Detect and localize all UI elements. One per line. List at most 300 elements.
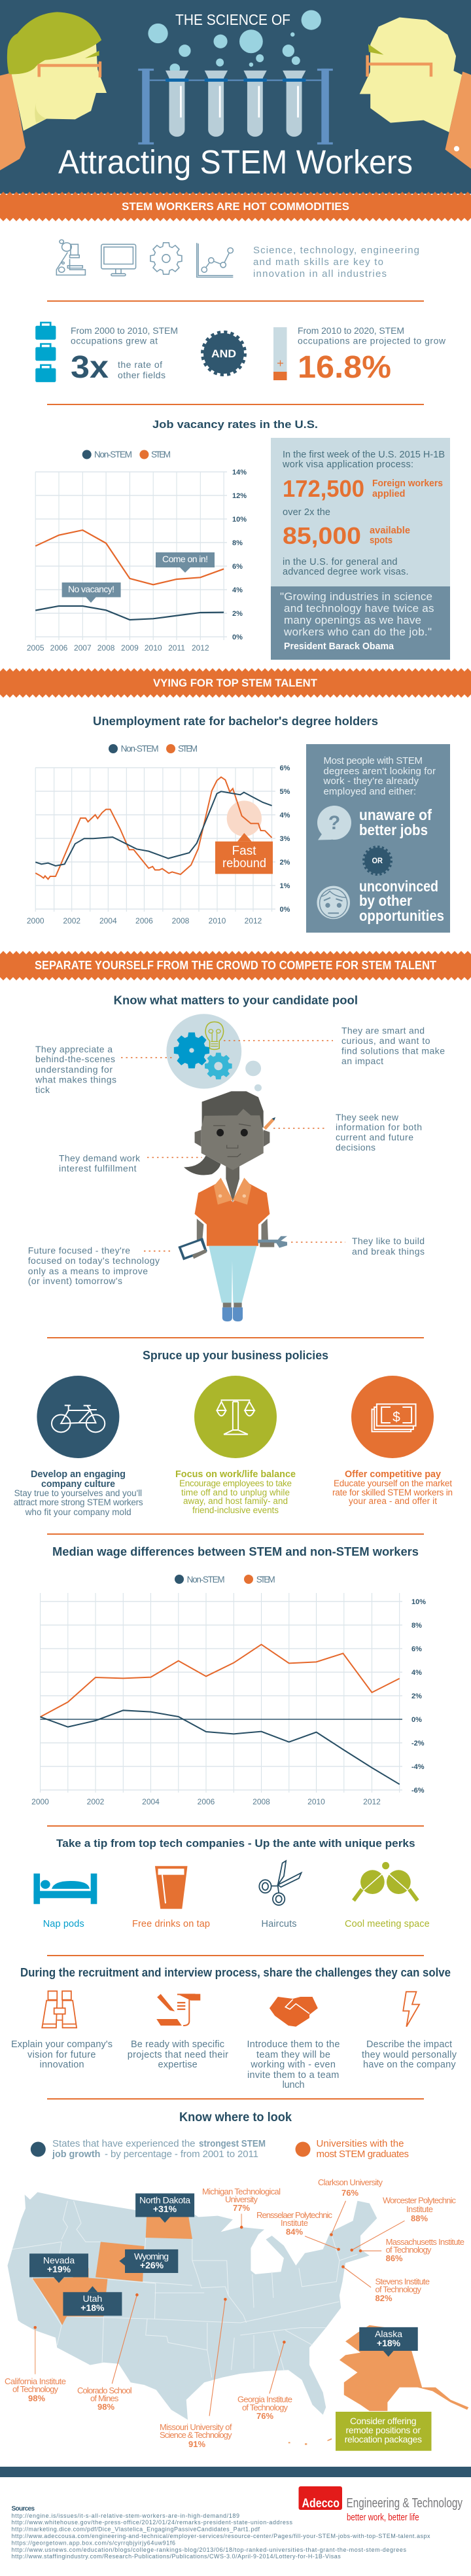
text: balance: Encourage employees to take <box>179 1478 292 1488</box>
challenges row <box>11 1991 457 2090</box>
leader lines <box>35 2201 405 2416</box>
text: impact <box>362 2039 457 2070</box>
label: Alaska: Alaska <box>375 2329 402 2339</box>
callout: fast rebound: Fast <box>232 844 256 858</box>
label: Utah: +18% <box>80 2302 105 2313</box>
annotation: behind the scenes: understanding for <box>35 1064 113 1075</box>
chart: job vacancy rates: 2012 <box>192 643 209 653</box>
legend: STEM <box>178 744 198 754</box>
legend: Non-STEM <box>121 744 159 754</box>
chart: unemployment rate: 2008 <box>172 916 190 925</box>
panel: H-1B visa figures: In the first week of the U.S. 2015 H-1B <box>283 450 445 460</box>
panel: why they aren't looking: employed and either: <box>323 786 416 797</box>
panel: H-1B visa figures: over 2x the <box>283 507 330 518</box>
line series <box>35 530 224 620</box>
university: MIT: of Technology <box>386 2245 432 2255</box>
title: Attracting STEM Workers <box>58 143 413 181</box>
panel: Obama quote: workers who can do the job." <box>283 626 432 638</box>
text: team: team they will be <box>256 2050 330 2060</box>
text: unconvinced: by other <box>359 892 412 909</box>
illustration: right scientist head <box>360 18 471 169</box>
axis labels <box>411 1598 426 1795</box>
title <box>58 11 413 181</box>
axis labels: 0% <box>280 906 290 914</box>
text: projects: Be ready with specific <box>131 2039 224 2050</box>
chart: job vacancy rates: 2009 <box>121 643 139 653</box>
stat: 3x rate: the rate of <box>118 359 162 370</box>
university: Missouri S&T: 91% <box>188 2439 205 2449</box>
text: projects <box>128 2039 228 2070</box>
stat: 172,500: applied <box>372 488 406 499</box>
university: Michigan Tech <box>202 2187 281 2213</box>
icon: bicycle <box>52 1405 105 1432</box>
axis labels: 2% <box>280 859 290 867</box>
text: balance: away, and host family- and <box>183 1496 288 1506</box>
text: unconvinced <box>359 878 444 924</box>
university: Missouri S&T <box>160 2422 232 2449</box>
callout: fast rebound: rebound <box>222 857 266 870</box>
axis labels: 3% <box>280 835 290 843</box>
heading: recruitment process: During the recruitment and interview process, share the challenges they can solve <box>20 1966 451 1979</box>
gauge: 16.8% bar <box>273 327 287 380</box>
axis labels: 5% <box>280 788 290 796</box>
university: Clarkson <box>318 2177 383 2198</box>
section banner: separate yourself: SEPARATE YOURSELF FROM THE CROWD TO COMPETE FOR STEM TALENT <box>35 959 436 972</box>
university: Colorado Mines: 98% <box>97 2402 114 2412</box>
university: Clarkson: 76% <box>341 2188 358 2198</box>
university: Worcester: Worcester Polytechnic <box>383 2196 457 2206</box>
state: Utah <box>66 2268 107 2317</box>
state: Alaska <box>340 2325 468 2411</box>
chart: median wage differences: 2008 <box>253 1797 270 1806</box>
text: unconvinced: unconvinced <box>359 878 438 895</box>
text: unconvinced: opportunities <box>359 907 444 924</box>
map: United States <box>5 2177 468 2449</box>
text: vision <box>11 2039 113 2070</box>
annotation: behind the scenes: They appreciate a <box>35 1044 113 1054</box>
icon: unsure face <box>317 886 350 919</box>
callout: remote positions: remote positions or <box>345 2425 421 2435</box>
stat: 3x rate: occupations grew at <box>71 335 158 346</box>
perk labels: Cool meeting space <box>345 1919 430 1929</box>
icon: question bubble: ? <box>328 812 340 834</box>
annotation: future focused: (or invent) tomorrow's <box>28 1276 122 1286</box>
annotation: seek new information: current and future <box>336 1132 413 1142</box>
state: North Dakota <box>146 2217 192 2239</box>
icon: bed <box>33 1874 97 1904</box>
university: Georgia Tech: 76% <box>256 2411 273 2421</box>
heading: candidate pool: Know what matters to your candidate pool <box>114 994 358 1007</box>
stat: 16.8% <box>298 325 446 385</box>
stat: 16.8%: occupations are projected to grow <box>298 335 446 346</box>
icon: binoculars <box>42 1991 77 2028</box>
university: Missouri S&T: Science & Technology <box>160 2430 232 2440</box>
university: Worcester: 88% <box>411 2213 428 2223</box>
annotation: build and break <box>291 1236 425 1257</box>
chart: job vacancy rates: 2008 <box>97 643 115 653</box>
badge: AND <box>203 333 244 374</box>
panel: H-1B visa figures: work visa application process: <box>282 459 413 470</box>
intro text <box>253 245 419 279</box>
legend <box>175 1575 275 1584</box>
text: culture: who fit your company mold <box>25 1507 131 1517</box>
university: Georgia Tech: of Technology <box>242 2403 288 2412</box>
highlight and line series <box>35 777 272 879</box>
icon: question bubble <box>317 806 351 840</box>
annotation: seek new information: decisions <box>336 1142 375 1153</box>
panel: Obama quote: many openings as we have <box>284 614 421 626</box>
text: impact: Describe the impact <box>366 2039 452 2050</box>
line series <box>41 1645 400 1784</box>
stat: 85,000 <box>283 522 410 549</box>
axis labels: 4% <box>280 812 290 819</box>
chart: median wage differences: 2002 <box>87 1797 105 1806</box>
section banner: vying for talent <box>0 668 471 698</box>
chart: unemployment rate: 2004 <box>99 916 117 925</box>
university: Worcester: Institute <box>406 2204 433 2214</box>
university: Stevens: of Technology <box>375 2285 421 2295</box>
illustration: left scientist head <box>0 12 107 170</box>
logo: Adecco: Adecco <box>302 2497 340 2511</box>
axis labels: 4% <box>411 1669 422 1677</box>
intro text: innovation in all industries <box>253 268 387 279</box>
chart: median wage differences <box>31 1575 426 1806</box>
chart: unemployment rate <box>27 744 290 925</box>
header panel <box>0 0 471 194</box>
stat: 3x rate: other fields <box>118 370 166 380</box>
illustration: candidate with thought bubble <box>166 1014 287 1321</box>
map legend: Universities with the <box>317 2138 404 2149</box>
annotation: smart and curious: find solutions that make <box>341 1046 445 1056</box>
university: Stevens <box>375 2276 430 2303</box>
chart: job vacancy rates: 2006 <box>50 643 68 653</box>
intro text: and math skills are key to <box>253 257 383 268</box>
legend <box>82 450 171 459</box>
axis labels <box>280 764 290 914</box>
icon: handshake <box>270 1997 318 2027</box>
university: MIT <box>386 2237 464 2263</box>
text: vision: vision for future <box>27 2050 96 2060</box>
heading: business policies: Spruce up your business policies <box>143 1349 328 1362</box>
callout: remote positions <box>336 2412 432 2451</box>
annotation: smart and curious: They are smart and <box>341 1026 425 1036</box>
badge: AND: AND <box>211 348 236 360</box>
icon: ping pong paddles <box>353 1862 417 1901</box>
perk labels: Haircuts <box>262 1919 297 1929</box>
axis labels: 10% <box>232 516 247 524</box>
chart: job vacancy rates: 2010 <box>145 643 162 653</box>
university: MIT: 86% <box>386 2253 403 2263</box>
badge: OR <box>364 848 391 874</box>
axis labels: 0% <box>232 634 243 641</box>
map legend: job growth <box>52 2149 100 2160</box>
stat: 172,500 <box>283 475 443 502</box>
axis labels: 6% <box>232 563 243 571</box>
legend: STEM <box>151 450 171 459</box>
icon: money <box>372 1404 416 1431</box>
university: Clarkson: Clarkson University <box>318 2177 383 2187</box>
annotation: behind the scenes <box>35 1044 175 1095</box>
label: Alaska <box>375 2329 402 2348</box>
sources: Sources <box>12 2505 35 2513</box>
thought bubble <box>166 1014 262 1091</box>
callout: remote positions: relocation packages <box>345 2434 422 2444</box>
text: balance <box>175 1469 296 1515</box>
text: pay: rate for skilled STEM workers in <box>332 1488 453 1497</box>
text: projects: expertise <box>158 2060 198 2070</box>
chart: unemployment rate: 2006 <box>135 916 153 925</box>
section banner: vying for talent: VYING FOR TOP STEM TALENT <box>153 677 318 689</box>
icon: tablet <box>178 1238 207 1261</box>
university: Colorado Mines: of Mines <box>90 2393 119 2403</box>
sources: http://www.usnews.com/education/blogs/college-rankings-blog/2013/06/18/top-ranked-universities-that-grant-the-most-stem-degrees <box>12 2547 407 2553</box>
text: balance: friend-inclusive events <box>192 1505 279 1515</box>
text: team <box>247 2039 340 2090</box>
annotation: behind the scenes: what makes things <box>35 1075 116 1085</box>
state: Nevada <box>33 2278 75 2325</box>
chart: job vacancy rates: 2007 <box>74 643 92 653</box>
axis labels: -6% <box>411 1787 425 1795</box>
icon: microscope <box>56 240 85 275</box>
text: pay: Offer competitive pay <box>345 1469 441 1480</box>
text: unaware of better jobs <box>359 806 432 838</box>
heading: perks: Take a tip from top tech companies - Up the ante with unique perks <box>56 1837 415 1850</box>
annotation: demand fulfillment: They demand work <box>59 1153 141 1164</box>
chart: unemployment rate: 2002 <box>63 916 80 925</box>
chart: median wage differences: 2004 <box>142 1797 160 1806</box>
label: Nevada: Nevada <box>43 2255 75 2266</box>
perk labels: Free drinks on tap <box>132 1919 210 1929</box>
section banner: hot commodities <box>0 192 471 221</box>
icon: line chart <box>197 243 233 277</box>
callout: Come on in: Come on in! <box>162 554 208 564</box>
section banner: hot commodities: STEM WORKERS ARE HOT COMMODITIES <box>122 200 349 213</box>
sources: http://marketing.dice.com/pdf/Dice_Vlastelica_EngagingPassiveCandidates_Part1.pdf <box>12 2526 260 2532</box>
axis labels: 8% <box>411 1622 422 1630</box>
axis labels: 2% <box>411 1692 422 1700</box>
stat: 3x rate <box>71 325 178 385</box>
annotation: smart and curious <box>224 1026 445 1066</box>
stat: 172,500: 172,500 <box>283 475 364 502</box>
heading: unemployment: Unemployment rate for bachelor's degree holders <box>93 715 378 728</box>
illustration: test tubes and bubbles <box>138 10 333 145</box>
icon: three suitcases <box>35 323 56 382</box>
text: team: Introduce them to the <box>247 2039 340 2050</box>
label: Utah: Utah <box>83 2293 102 2304</box>
university: Michigan Tech: University <box>225 2194 258 2204</box>
university: Rensselaer: Rensselaer Polytechnic <box>256 2210 332 2220</box>
university: Caltech: 98% <box>28 2393 45 2403</box>
label: Nevada: +19% <box>47 2264 71 2274</box>
university: Caltech: of Technology <box>12 2384 59 2394</box>
annotation: smart and curious: an impact <box>341 1056 383 1066</box>
person <box>184 1091 270 1321</box>
text: unaware of better jobs: unaware of <box>359 806 432 823</box>
annotation: behind the scenes: behind-the-scenes <box>35 1054 115 1064</box>
axis labels: -2% <box>411 1740 425 1747</box>
axis labels <box>232 469 247 641</box>
axis labels: 4% <box>232 586 243 594</box>
policy: company culture <box>14 1376 143 1517</box>
chart: unemployment rate: 2012 <box>245 916 262 925</box>
label: North Dakota: North Dakota <box>139 2195 190 2206</box>
axis labels: 12% <box>232 492 247 500</box>
heading: know where to look: Know where to look <box>179 2111 292 2124</box>
label: Wyoming: +26% <box>140 2260 164 2270</box>
icon: monitor <box>101 244 136 276</box>
callout: fast rebound <box>215 833 273 874</box>
annotation: behind the scenes: tick <box>35 1084 50 1095</box>
stat: 172,500: Foreign workers <box>372 478 443 489</box>
sources: http://engine.is/issues/it-s-all-relative-stem-workers-are-in-high-demand/189 <box>12 2513 239 2519</box>
annotation: future focused: Future focused - they're <box>28 1245 130 1255</box>
panel: H-1B visa figures: advanced degree work visas. <box>283 567 408 577</box>
continental US shape <box>7 2192 377 2420</box>
label: Wyoming: Wyoming <box>134 2251 169 2262</box>
axis labels: 8% <box>232 539 243 547</box>
logo: Adecco: better work, better life <box>347 2512 419 2523</box>
panel: why they aren't looking: Most people with STEM <box>323 755 423 766</box>
axis labels: -4% <box>411 1763 425 1771</box>
legend: Non-STEM <box>94 450 132 459</box>
icons: STEM outlines <box>56 240 233 277</box>
stat: 16.8%: 16.8% <box>298 350 391 385</box>
sources: http://www.whitehouse.gov/the-press-office/2012/01/24/remarks-president-state-union-address <box>12 2519 292 2526</box>
stat: 3x rate: 3x <box>71 350 109 385</box>
map legend: most STEM graduates <box>317 2149 409 2160</box>
axis labels: 6% <box>280 764 290 772</box>
panel: growth stats <box>35 323 446 385</box>
label boxes <box>29 2193 418 2357</box>
text: pay: your area - and offer it <box>349 1496 437 1506</box>
stat: 85,000: spots <box>370 535 392 546</box>
text: pay: Educate yourself on the market <box>334 1478 452 1488</box>
heading: job vacancy: Job vacancy rates in the U.S. <box>152 418 318 431</box>
logo: Adecco <box>298 2486 462 2523</box>
callout: No vacancy <box>62 582 121 603</box>
legend <box>109 744 198 754</box>
university: Michigan Tech: 77% <box>233 2203 250 2213</box>
university: Rensselaer <box>256 2210 332 2237</box>
map legend: strongest STEM <box>199 2138 266 2149</box>
icon: scales <box>217 1400 254 1435</box>
university: Georgia Tech <box>237 2395 292 2421</box>
axis labels: 10% <box>411 1598 426 1606</box>
axis labels: 14% <box>232 469 247 476</box>
panel: Obama quote <box>271 586 450 660</box>
university: Rensselaer: Institute <box>281 2218 308 2228</box>
chart: median wage differences: 2006 <box>198 1797 215 1806</box>
university: Rensselaer: 84% <box>286 2227 303 2237</box>
panel: Obama quote: and technology have twice as <box>284 602 434 615</box>
title: THE SCIENCE OF <box>175 11 290 28</box>
icon: script and pencil <box>156 1994 200 2026</box>
chart: median wage differences: 2000 <box>31 1797 49 1806</box>
chart: job vacancy rates: 2005 <box>27 643 44 653</box>
university: MIT: Massachusetts Institute <box>386 2237 464 2247</box>
university: Michigan Tech: Michigan Technological <box>202 2187 281 2196</box>
axis labels: 2% <box>232 610 243 618</box>
chart: median wage differences: 2012 <box>363 1797 381 1806</box>
text: culture: Develop an engaging <box>31 1469 126 1480</box>
icon: scissors <box>259 1861 302 1905</box>
sources <box>12 2505 430 2560</box>
legend: STEM <box>256 1575 275 1584</box>
policy: competitive pay <box>332 1376 453 1506</box>
heading: median wage: Median wage differences between STEM and non-STEM workers <box>52 1545 419 1558</box>
axis labels: 6% <box>411 1645 422 1653</box>
perks row <box>33 1861 430 1929</box>
university: Colorado Mines: Colorado School <box>77 2386 132 2395</box>
annotation: seek new information: information for both <box>336 1122 422 1132</box>
chart: unemployment rate: 2010 <box>209 916 226 925</box>
chart: median wage differences: 2010 <box>307 1797 325 1806</box>
label: Utah <box>80 2293 105 2313</box>
text: impact: they would personally <box>362 2050 457 2060</box>
annotation: smart and curious: curious, and want to <box>341 1035 430 1046</box>
text: unaware of better jobs: better jobs <box>359 821 428 838</box>
panel: H-1B visa figures: in the U.S. for general and <box>283 557 398 567</box>
text: vision: Explain your company's <box>11 2039 113 2050</box>
annotation: demand fulfillment: interest fulfillment <box>59 1163 137 1173</box>
map legend: States that have experienced the <box>52 2138 195 2149</box>
text: culture <box>14 1469 143 1517</box>
label: North Dakota: +31% <box>153 2204 177 2214</box>
panel: Obama quote: "Growing industries in science <box>280 590 432 603</box>
icon: wrench <box>258 1236 287 1248</box>
map legend: - by percentage - from 2001 to 2011 <box>105 2149 258 2160</box>
university: Colorado Mines <box>77 2386 132 2412</box>
chart: job vacancy rates <box>27 450 247 653</box>
sources: https://georgetown.app.box.com/s/cyrrqbjyirjy64uw91f6 <box>12 2539 175 2546</box>
text: projects: projects that need their <box>128 2050 228 2060</box>
icon: pencil <box>264 1117 275 1130</box>
annotation: demand fulfillment <box>59 1153 202 1173</box>
university: Missouri S&T: Missouri University of <box>160 2422 232 2432</box>
label: Nevada <box>43 2255 75 2274</box>
annotation: future focused <box>28 1245 173 1286</box>
university: Georgia Tech: Georgia Institute <box>237 2395 292 2405</box>
label: Wyoming <box>134 2251 169 2270</box>
panel: why they aren't looking: degrees aren't looking for <box>323 766 436 777</box>
axis labels: 1% <box>280 882 290 890</box>
footer bar <box>0 2467 471 2477</box>
text: impact: have on the company <box>363 2060 456 2070</box>
policy: competitive pay: $ <box>392 1410 400 1425</box>
text: pay <box>332 1469 453 1506</box>
panel: Obama quote: President Barack Obama <box>284 641 394 652</box>
callout: No vacancy: No vacancy! <box>68 584 114 594</box>
intro text: Science, technology, engineering <box>253 245 419 256</box>
text: team: lunch <box>283 2080 305 2090</box>
icon: drink glass <box>155 1866 188 1909</box>
chart: unemployment rate: 2000 <box>27 916 44 925</box>
annotation: future focused: focused on today's technology <box>28 1255 160 1266</box>
university: Worcester <box>383 2196 457 2223</box>
text: culture: Stay true to yourselves and you'll <box>14 1488 142 1498</box>
annotation: seek new information <box>273 1112 422 1153</box>
university: Stevens: 82% <box>375 2293 392 2303</box>
text: team: invite them to a team <box>247 2070 339 2081</box>
callout: Come on in <box>156 552 215 573</box>
annotation: build and break: They like to build <box>352 1236 425 1246</box>
text: balance: time off and to unplug while <box>181 1488 290 1497</box>
policy: work/life balance <box>175 1376 296 1515</box>
section banner: separate yourself <box>0 951 471 980</box>
axis labels: 0% <box>411 1716 422 1724</box>
stat: 85,000: 85,000 <box>283 522 361 549</box>
callout: remote positions: Consider offering <box>350 2416 416 2426</box>
